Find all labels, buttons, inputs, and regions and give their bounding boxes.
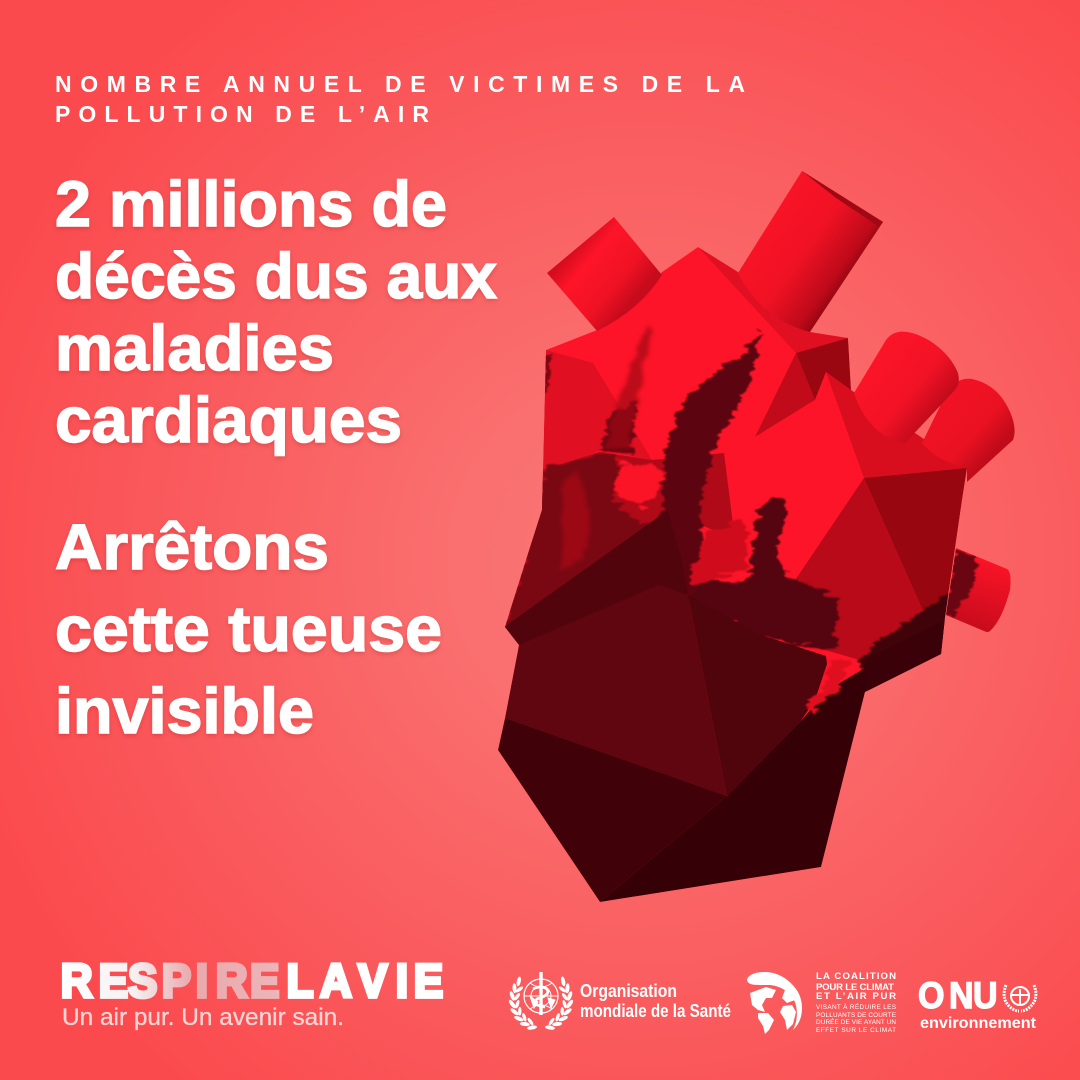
front block right facet [864,468,967,617]
icon: UNEP emblem [1004,985,1036,1011]
mid dark facet left [505,585,727,796]
environnement text: environnement [920,1015,1036,1032]
logo: Climate and Clean Air Coalition [747,971,896,1034]
lower facet dark right [600,668,865,902]
bright red patches between smoke [614,462,852,714]
coalition text: DURÉE DE VIE AYANT UN [816,1017,896,1026]
main headline: deaths: cardiaques [55,384,402,456]
kicker heading [55,71,745,127]
icon: WHO emblem [508,972,574,1030]
WHO name [580,981,731,1021]
front block top facet [826,372,967,478]
coalition text [816,971,896,1034]
coalition text: EFFET SUR LE CLIMAT [816,1027,896,1034]
smoke stain [504,330,955,695]
coalition text: POUR LE CLIMAT [816,982,894,993]
cylinder vessel: middle right [854,332,959,443]
upper right side facets [796,338,851,400]
cylinder vessel: top right [738,171,883,332]
coalition text: POLLUANTS DE COURTE [816,1012,896,1019]
kicker heading: NOMBRE ANNUEL DE VICTIMES DE LA [55,71,745,97]
cylinder vessel: far right [922,379,1015,482]
mid dark facet right [688,595,827,796]
coalition text: LA COALITION [816,971,896,982]
headline: call to action [55,511,442,747]
logo: World Health Organization [508,972,731,1030]
main headline: deaths: maladies [55,312,334,384]
wordmark: RESPIRE [61,955,279,1007]
upper right top facet [698,247,848,353]
kicker heading: POLLUTION DE L’AIR [55,101,429,127]
WHO name: Organisation [580,981,677,1001]
campaign logo: Respire la vie [61,955,443,1031]
front block bright facet [756,372,826,436]
coalition text: ET L’AIR PUR [816,991,896,1002]
main headline: deaths: 2 millions de [55,168,447,240]
headline: call to action: Arrêtons [55,511,329,583]
wordmark: LAVIE [287,955,443,1007]
tagline: Un air pur. Un avenir sain. [62,1004,344,1031]
front block middle facet [795,478,943,660]
headline: call to action: invisible [55,675,314,747]
cylinder vessel: lower right [944,548,1011,632]
main headline: deaths: décès dus aux [55,240,497,312]
ONU letters: ONU [918,975,998,1016]
solid dark lower right edge [865,620,945,695]
left low facet [505,452,735,645]
lower facet dark left [498,718,727,902]
polygonal heart illustration [498,171,1015,902]
left dark diagonal band [504,510,688,645]
wordmark [61,955,443,1007]
logo: UN Environment [918,975,1036,1032]
soft smoke streaks [562,325,652,570]
upper left facet [542,350,652,480]
cylinder vessel: top left [547,217,662,331]
coalition text: VISANT À RÉDUIRE LES [816,1002,896,1011]
WHO name: mondiale de la Santé [580,1001,731,1021]
headline: call to action: cette tueuse [55,593,442,665]
main headline: deaths [55,168,497,456]
icon: CCAC globe [747,972,802,1034]
heart body facets [498,247,967,902]
